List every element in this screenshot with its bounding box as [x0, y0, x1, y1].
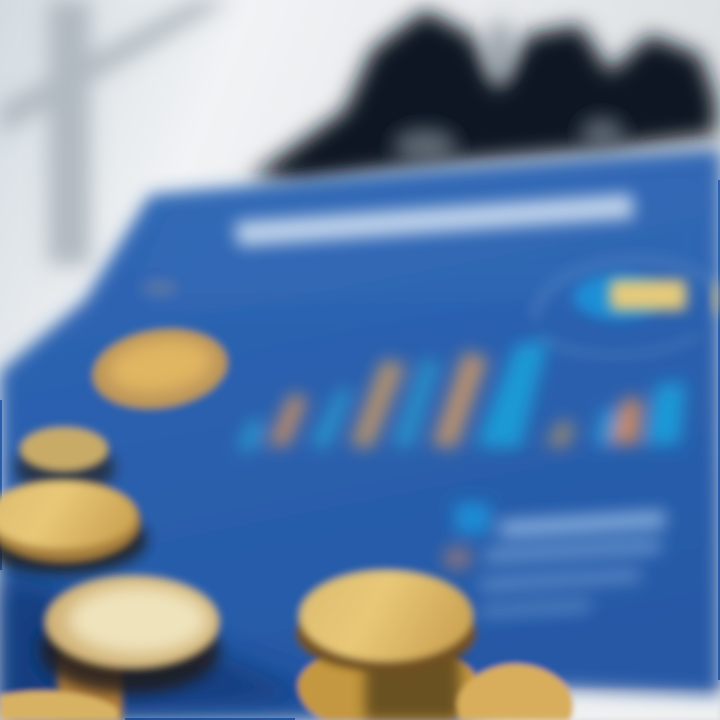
bar chart	[236, 340, 685, 450]
blue card	[0, 150, 720, 720]
title bar	[235, 194, 634, 246]
card edge underlay	[0, 180, 720, 720]
coin: bottom right	[457, 664, 573, 720]
small header mark	[142, 279, 178, 297]
coin stack: centre left	[40, 576, 220, 720]
dark silhouettes	[250, 10, 716, 182]
grey haze over silhouettes	[393, 20, 624, 161]
card upper highlight	[130, 160, 720, 310]
coin stack: centre	[296, 570, 478, 720]
coin: bottom-left corner	[0, 691, 118, 720]
legend block	[445, 503, 665, 616]
blurred window frame	[0, 0, 230, 265]
bottom right surface	[540, 692, 720, 720]
coin: small back	[15, 427, 115, 494]
gold oval badge	[87, 321, 233, 417]
dark lower band	[0, 570, 330, 720]
coin: left	[0, 481, 147, 574]
ring gauge with gold label	[535, 260, 720, 356]
